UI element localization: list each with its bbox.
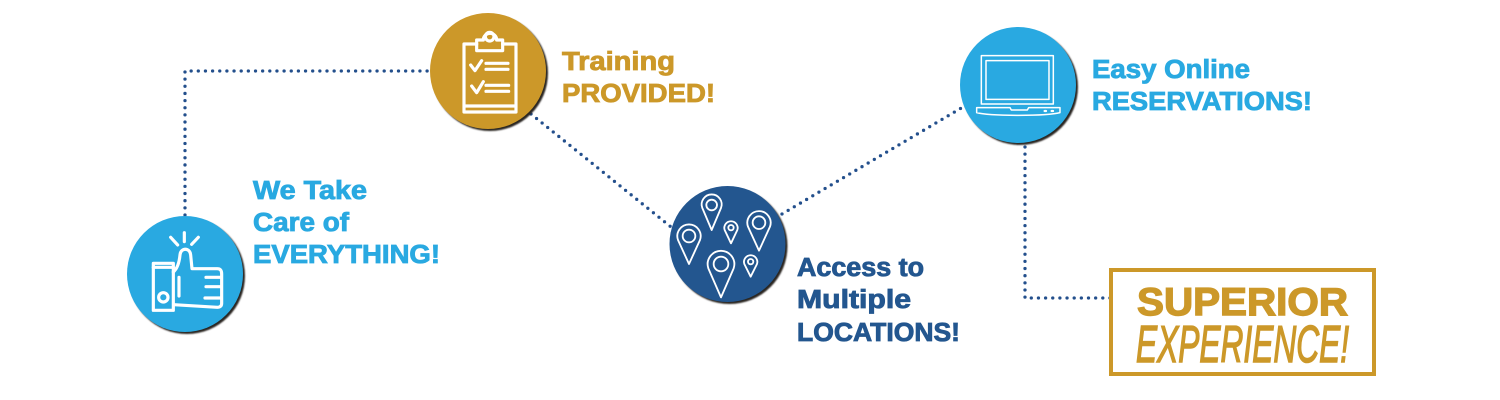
label: we take care of everything: Care of <box>253 209 350 237</box>
label: easy online reservations <box>1092 56 1312 116</box>
label: we take care of everything: We Take <box>253 177 367 205</box>
icon: thumbs up <box>153 233 222 310</box>
icon: laptop <box>977 56 1060 115</box>
icon: map pins <box>677 194 771 297</box>
heading: experience: EXPERIENCE! <box>1136 316 1349 374</box>
label: we take care of everything <box>253 177 440 269</box>
connector: training to locations <box>531 114 671 227</box>
label: training provided: Training <box>562 48 675 76</box>
label: access to multiple locations: Multiple <box>797 286 911 314</box>
connector: locations to reservations <box>782 107 963 214</box>
step 2: clipboard circle <box>430 13 548 131</box>
step 3: location pins circle <box>670 186 788 304</box>
connector: reservations to superior experience <box>1025 147 1112 298</box>
label: access to multiple locations: Access to <box>797 254 924 282</box>
icon: clipboard checklist <box>464 32 516 112</box>
label: we take care of everything: EVERYTHING! <box>253 241 440 269</box>
step 1: thumbs up circle <box>127 216 245 334</box>
step 4: laptop circle <box>960 27 1078 145</box>
label: easy online reservations: Easy Online <box>1092 56 1250 84</box>
label: training provided <box>562 48 715 108</box>
label: access to multiple locations <box>797 254 960 347</box>
label: access to multiple locations: LOCATIONS! <box>797 319 960 347</box>
connector: thumbs up to training <box>185 71 430 215</box>
heading: superior: SUPERIOR <box>1137 281 1348 324</box>
label: training provided: PROVIDED! <box>562 80 715 108</box>
callout: superior experience box <box>1111 270 1374 374</box>
label: easy online reservations: RESERVATIONS! <box>1092 88 1312 116</box>
